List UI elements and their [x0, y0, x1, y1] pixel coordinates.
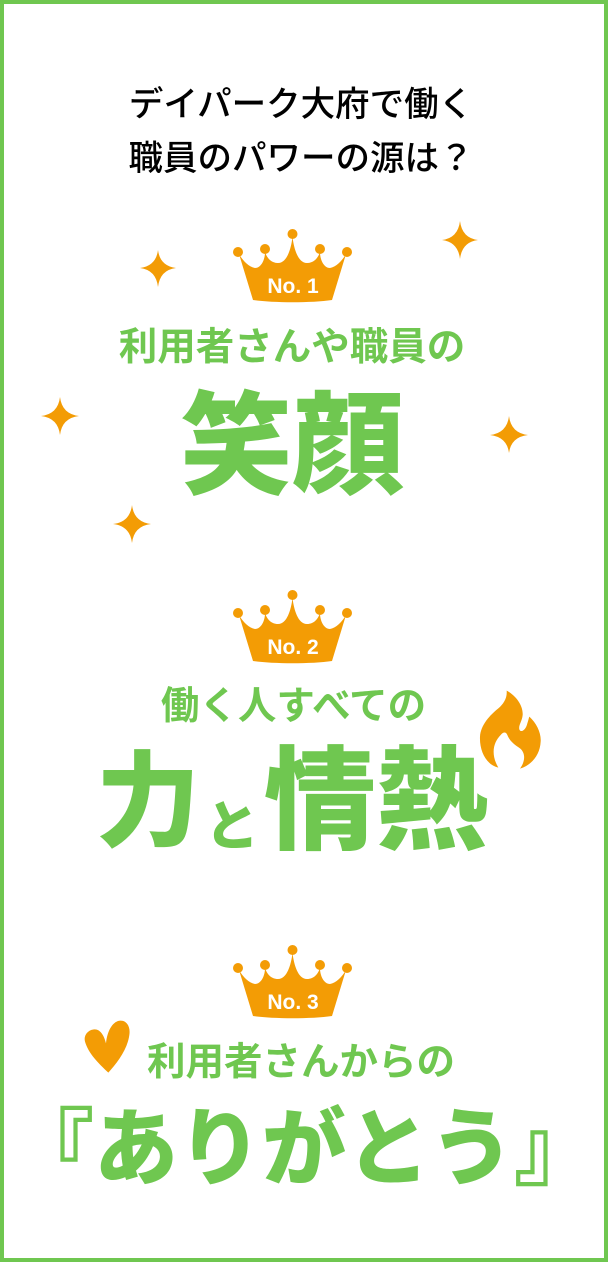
- icon: heart: [84, 1020, 130, 1073]
- rank 2 crown: [233, 590, 352, 664]
- rank 1 subheading: 利用者さんや職員の: [119, 326, 465, 369]
- rank 2 main word: と: [205, 797, 259, 857]
- rank 2 crown: No. 2: [267, 636, 319, 659]
- rank 2 subheading: 働く人すべての: [161, 685, 426, 728]
- rank 2 main word: [96, 739, 488, 864]
- rank 2 main word: 力: [96, 745, 200, 861]
- rank 3 subheading: 利用者さんからの: [147, 1041, 455, 1084]
- rank 3 crown: No. 3: [267, 991, 319, 1014]
- title: デイパーク大府で働く: [129, 86, 473, 124]
- rank 1 crown: [233, 229, 352, 302]
- sparkles: [41, 221, 528, 543]
- rank 1 main word: 笑顔: [180, 384, 404, 509]
- rank 3 crown: [233, 945, 352, 1018]
- title: 職員のパワーの源は？: [128, 140, 474, 178]
- icon: flame: [480, 690, 541, 769]
- rank 3 main word: 『ありがとう』: [10, 1102, 598, 1196]
- rank 2 main word: 情熱: [264, 739, 488, 864]
- title: [128, 86, 474, 178]
- rank 1 crown: No. 1: [267, 275, 319, 298]
